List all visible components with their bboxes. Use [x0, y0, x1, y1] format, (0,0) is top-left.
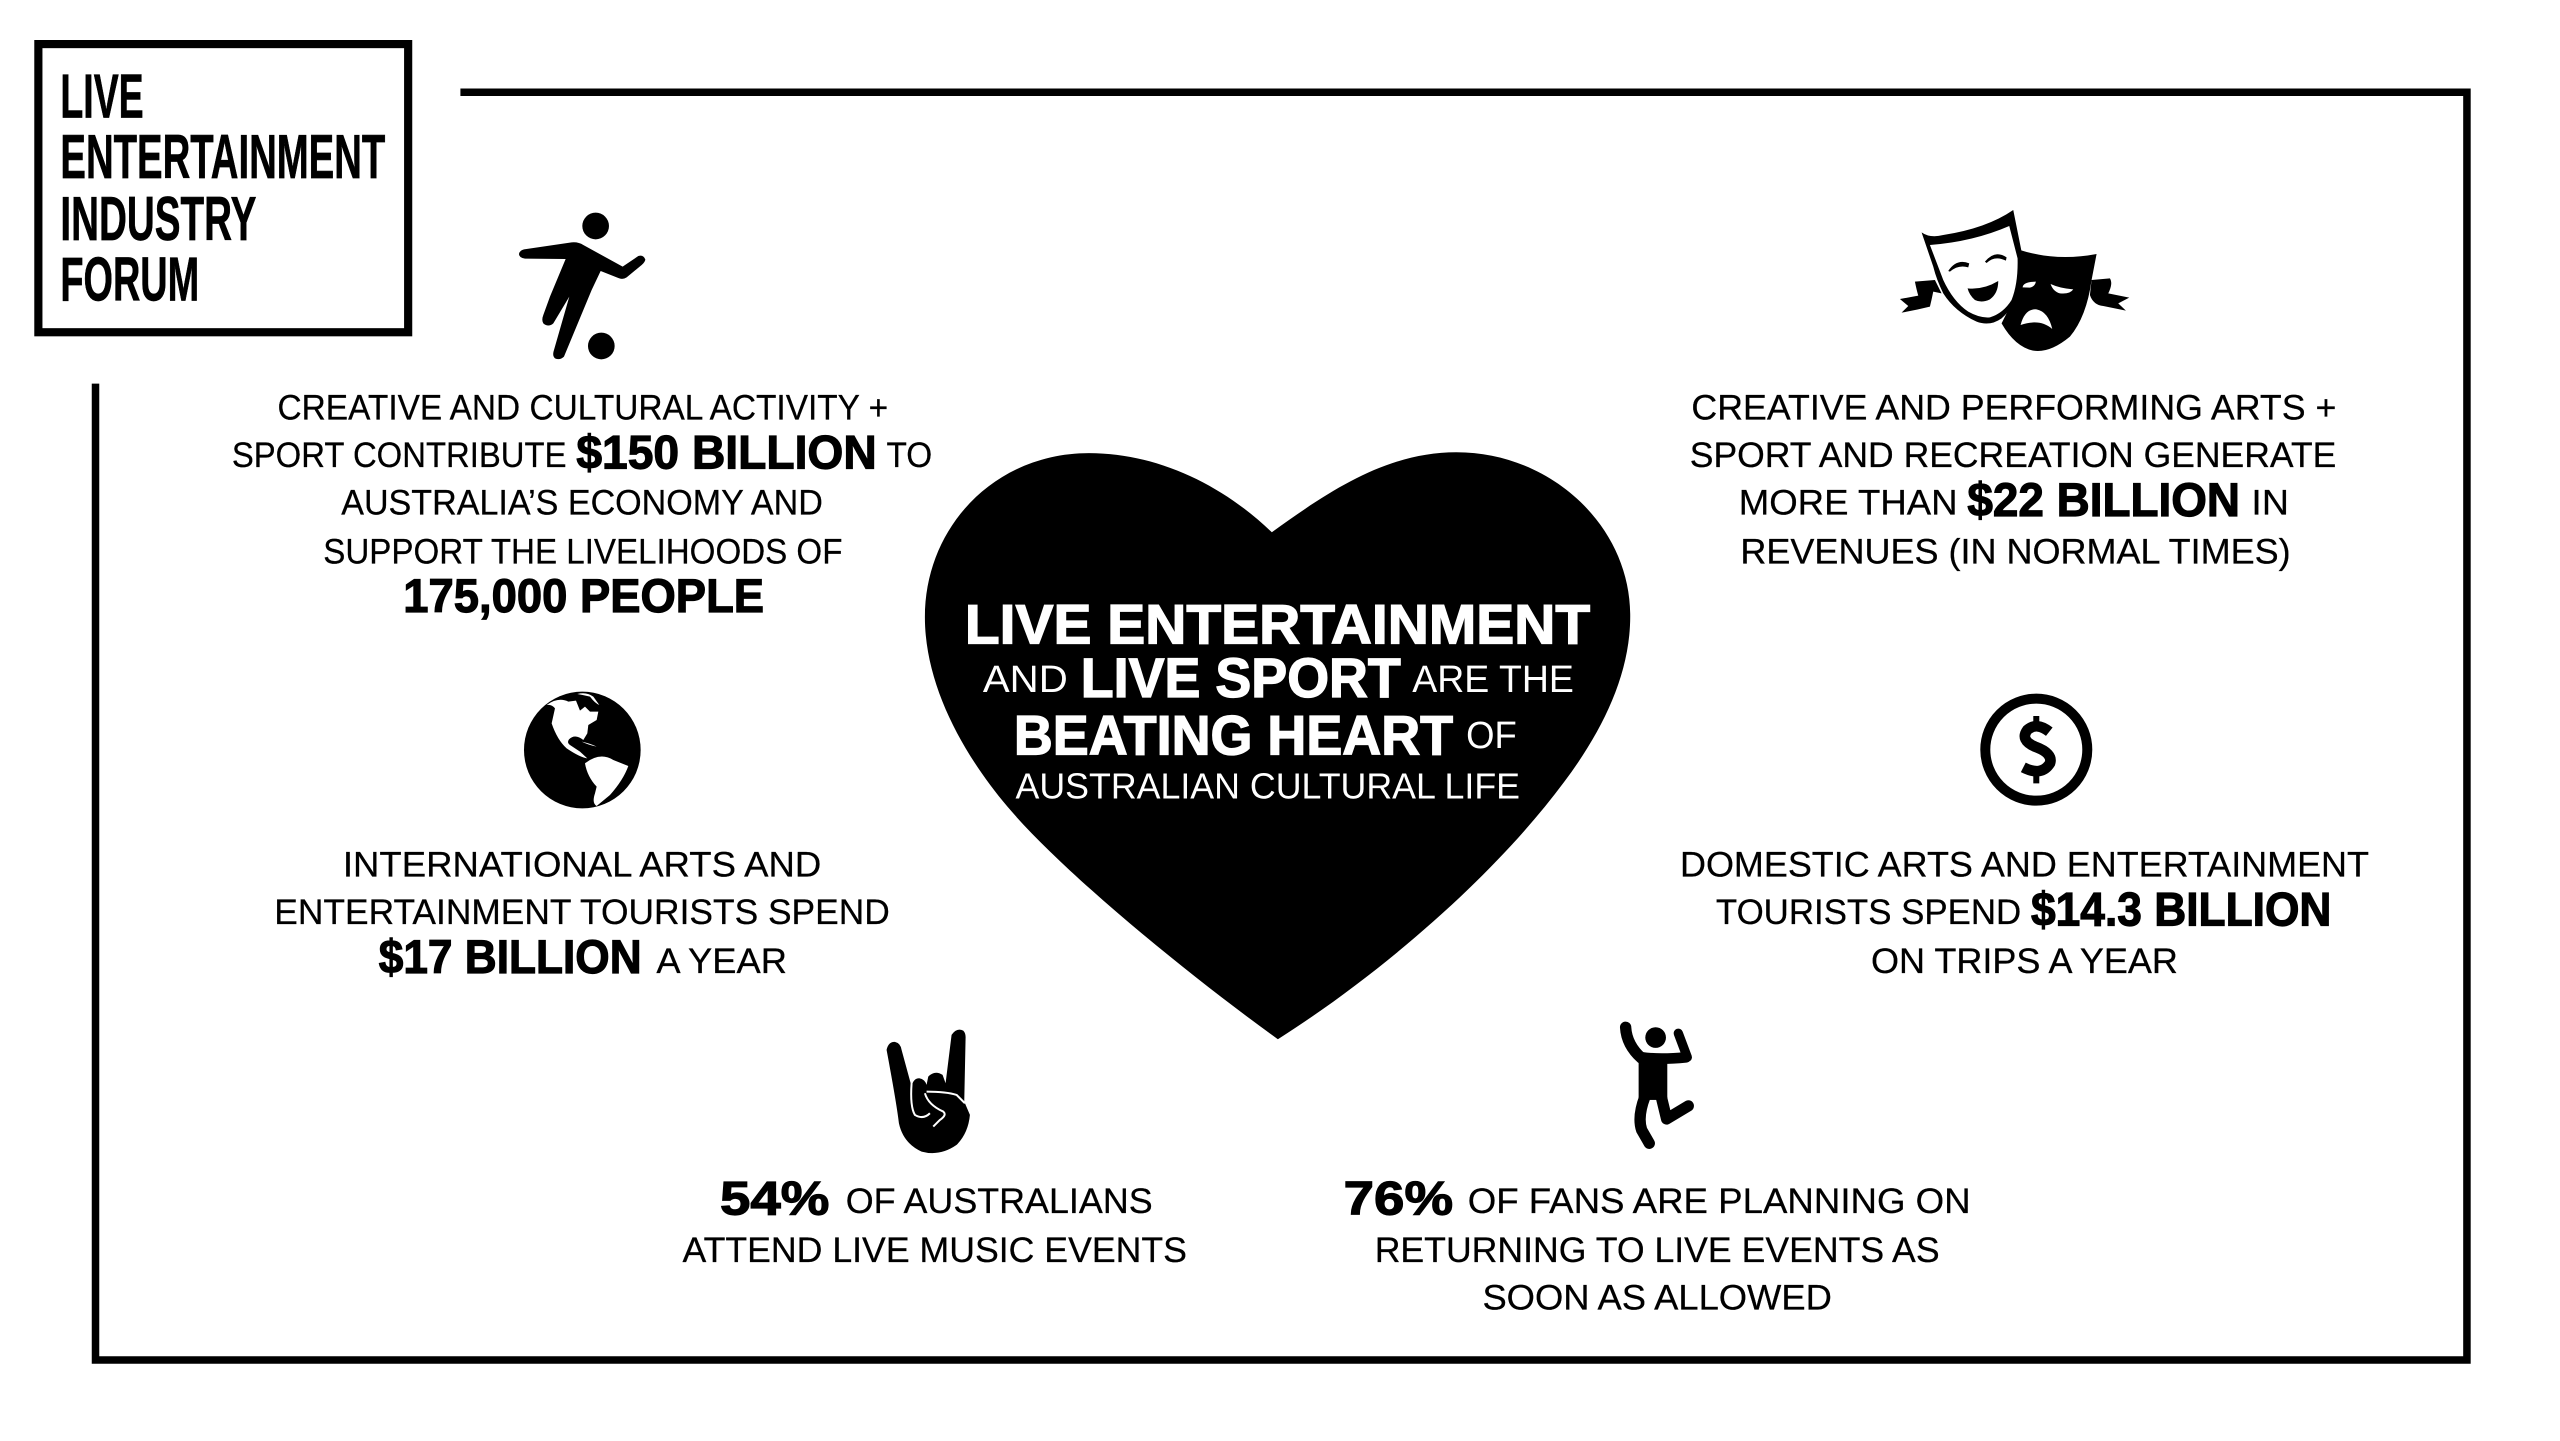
- heart with central message: LIVE ENTERTAINMENT: [965, 593, 1590, 655]
- text: international spend: [274, 846, 890, 984]
- icon: globe: [524, 692, 641, 808]
- heart with central message: BEATING HEART: [1014, 704, 1453, 766]
- text: revenues: [1690, 389, 2336, 571]
- text: economic contribution: SUPPORT THE LIVELIHOODS OF: [323, 532, 842, 571]
- heart with central message: ARE THE: [1412, 658, 1574, 700]
- panel: international tourists: [274, 692, 890, 984]
- text: revenues: MORE THAN: [1739, 483, 1958, 522]
- text: economic contribution: AUSTRALIA’S ECONOMY AND: [341, 483, 823, 522]
- text: 76 percent: OF FANS ARE PLANNING ON: [1468, 1182, 1971, 1221]
- text: economic contribution: 175,000 PEOPLE: [403, 570, 764, 623]
- icon: rock hand: [887, 1030, 970, 1153]
- text: revenues: $22 BILLION: [1967, 474, 2240, 527]
- logo box: INDUSTRY: [60, 185, 256, 254]
- text: domestic spend: ON TRIPS A YEAR: [1871, 942, 2178, 981]
- text: economic contribution: $150 BILLION: [576, 427, 877, 480]
- text: domestic spend: DOMESTIC ARTS AND ENTERTAINMENT: [1680, 846, 2369, 885]
- text: revenues: CREATIVE AND PERFORMING ARTS +: [1691, 389, 2336, 428]
- heart with central message: AUSTRALIAN CULTURAL LIFE: [1016, 765, 1520, 806]
- text: revenues: SPORT AND RECREATION GENERATE: [1690, 436, 2336, 475]
- text: 76 percent: [1344, 1173, 1971, 1317]
- icon: jumping person: [1626, 1027, 1688, 1143]
- text: 54 percent: ATTEND LIVE MUSIC EVENTS: [682, 1231, 1187, 1270]
- text: domestic spend: $14.3 BILLION: [2031, 884, 2331, 937]
- panel: creative and cultural activity: [232, 213, 932, 623]
- panel: live music attendance: [682, 1030, 1187, 1270]
- text: domestic spend: TOURISTS SPEND: [1716, 893, 2021, 932]
- text: 76 percent: SOON AS ALLOWED: [1482, 1278, 1832, 1317]
- text: 54 percent: OF AUSTRALIANS: [846, 1182, 1153, 1221]
- text: international spend: A YEAR: [656, 942, 787, 981]
- text: international spend: ENTERTAINMENT TOURISTS SPEND: [274, 893, 890, 932]
- text: domestic spend: [1680, 846, 2369, 981]
- heart with central message: OF: [1466, 714, 1517, 756]
- text: 54 percent: [682, 1173, 1187, 1270]
- heart with central message: LIVE SPORT: [1081, 647, 1401, 709]
- panel: returning fans: [1344, 1027, 1971, 1317]
- text: international spend: $17 BILLION: [379, 931, 642, 984]
- text: economic contribution: CREATIVE AND CULTURAL ACTIVITY +: [278, 389, 888, 428]
- text: economic contribution: [232, 389, 932, 623]
- panel: creative and performing arts: [1690, 210, 2336, 571]
- logo box: LIVE: [60, 63, 144, 132]
- text: 76 percent: 76%: [1344, 1173, 1453, 1226]
- heart with central message: [925, 452, 1630, 1039]
- text: 76 percent: RETURNING TO LIVE EVENTS AS: [1375, 1231, 1940, 1270]
- icon: dollar coin: [1985, 699, 2087, 801]
- icon: theatre masks: [1900, 210, 2129, 351]
- text: 54 percent: 54%: [720, 1173, 829, 1226]
- heart with central message: AND: [983, 658, 1068, 700]
- text: economic contribution: TO: [887, 436, 932, 475]
- text: revenues: REVENUES (IN NORMAL TIMES): [1740, 532, 2291, 571]
- panel: domestic tourists: [1680, 699, 2369, 981]
- text: international spend: INTERNATIONAL ARTS AND: [343, 846, 821, 885]
- logo box: FORUM: [60, 245, 199, 314]
- logo box: [38, 44, 408, 332]
- text: revenues: IN: [2251, 483, 2289, 522]
- icon: footballer kicking ball: [519, 213, 645, 359]
- logo box: ENTERTAINMENT: [60, 123, 385, 192]
- text: economic contribution: SPORT CONTRIBUTE: [232, 436, 567, 475]
